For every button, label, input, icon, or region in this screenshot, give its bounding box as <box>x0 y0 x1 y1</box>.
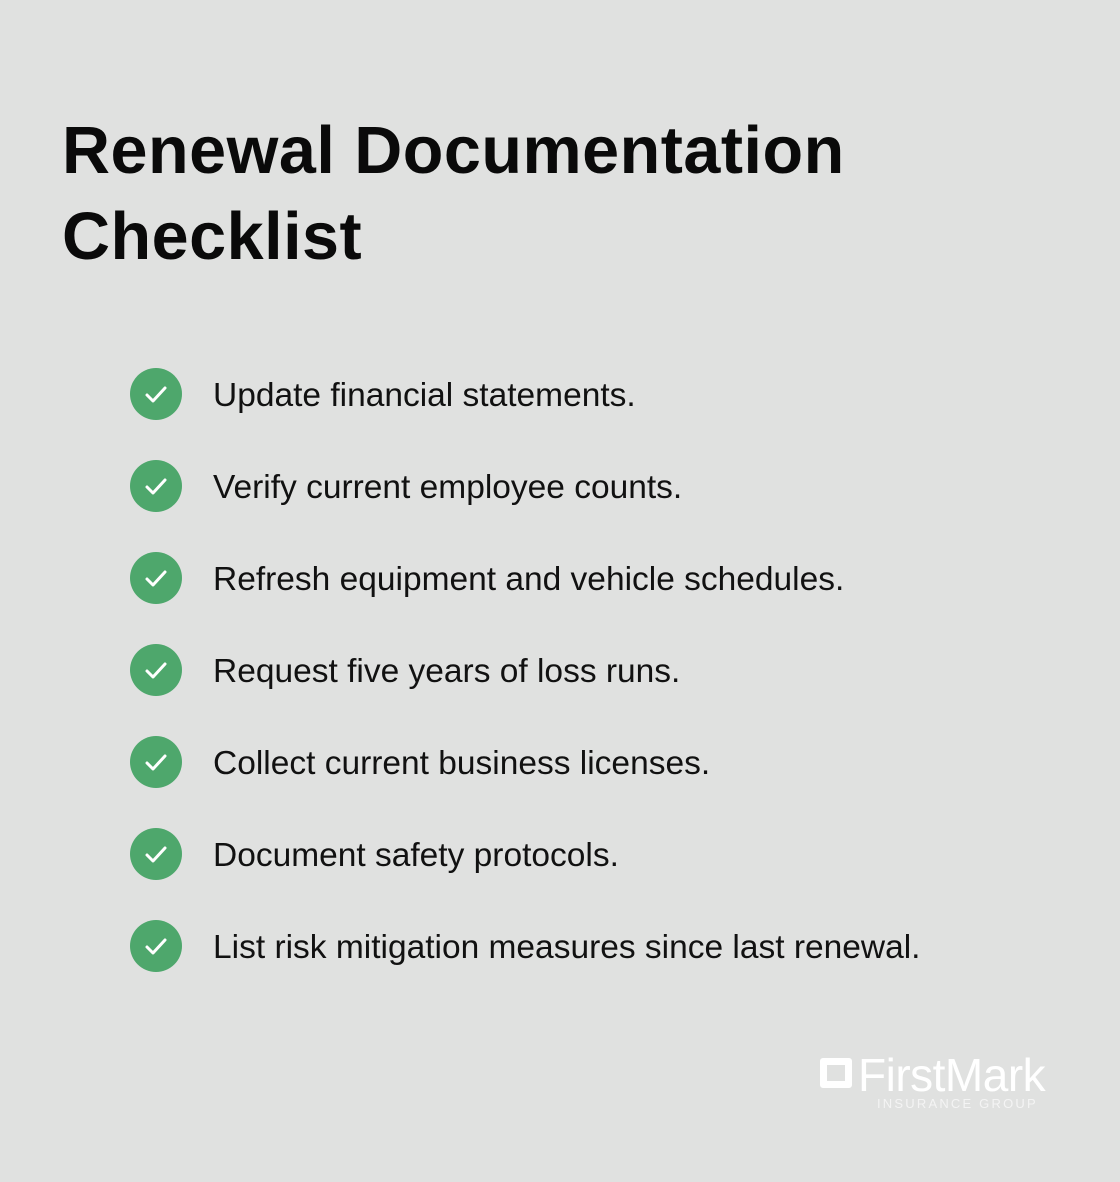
title: Checklist <box>62 200 362 274</box>
item 7: List risk mitigation measures since last renewal. <box>213 929 920 966</box>
item 3 <box>130 552 844 604</box>
item 1 <box>130 368 636 420</box>
item 3: Refresh equipment and vehicle schedules. <box>213 561 844 598</box>
item 4 <box>130 644 680 696</box>
logo: INSURANCE GROUP <box>877 1096 1038 1111</box>
item 6: Document safety protocols. <box>213 837 619 874</box>
item 7 <box>130 920 920 972</box>
item 1: Update financial statements. <box>213 377 636 414</box>
title: Renewal Documentation <box>62 114 845 188</box>
logo: FirstMark <box>858 1049 1045 1101</box>
item 2 <box>130 460 682 512</box>
item 5 <box>130 736 710 788</box>
item 4: Request five years of loss runs. <box>213 653 680 690</box>
title <box>62 114 845 274</box>
item 5: Collect current business licenses. <box>213 745 710 782</box>
item 6 <box>130 828 619 880</box>
logo <box>820 1049 1046 1111</box>
item 2: Verify current employee counts. <box>213 469 682 506</box>
